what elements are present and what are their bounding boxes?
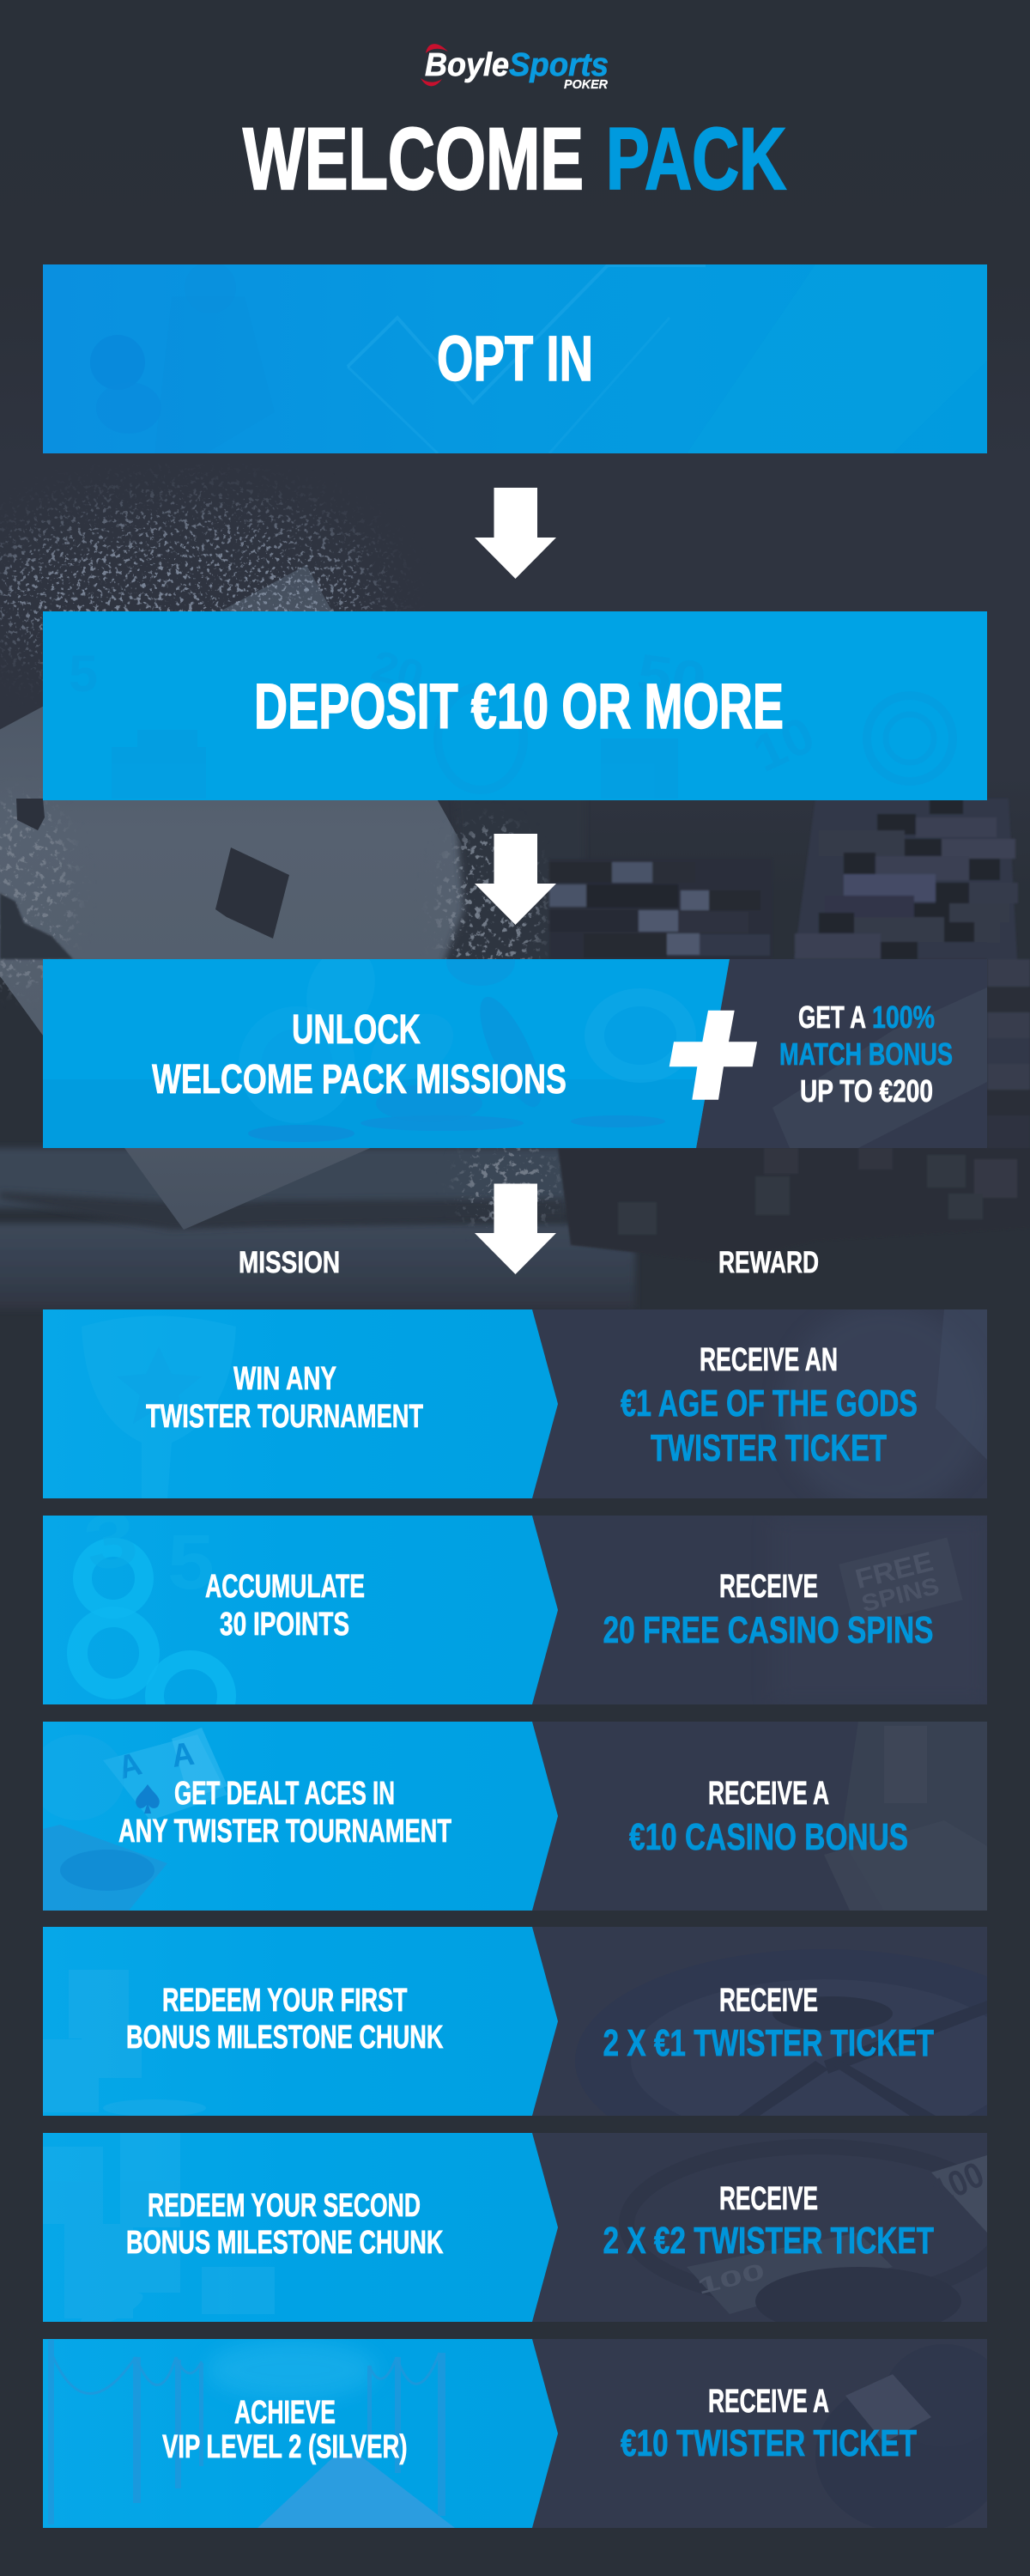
bonus text: 100% — [872, 999, 935, 1035]
row 1: twister tournament: TWISTER TICKET — [651, 1427, 887, 1469]
arrow 3 — [475, 1183, 556, 1274]
row 4: first bonus milestone: RECEIVE — [719, 1983, 818, 2019]
row 3: dealt aces — [30, 1722, 987, 1911]
logo: BoyleSports Poker: Boyle — [425, 47, 509, 83]
card — [0, 566, 467, 1230]
panel: unlock missions plus match bonus — [43, 959, 987, 1148]
row 5: second bonus milestone: 100 — [926, 2154, 990, 2212]
arrow 2 — [475, 834, 556, 925]
panel: deposit: 20 — [367, 641, 429, 701]
icon: plus sign — [670, 1011, 757, 1100]
row 2: accumulate ipoints: SPINS — [859, 1572, 942, 1617]
panel: deposit — [43, 611, 987, 800]
row 3: dealt aces: GET DEALT ACES IN — [174, 1776, 395, 1812]
row 6: vip level: RECEIVE A — [708, 2384, 829, 2420]
row 3: dealt aces: €10 CASINO BONUS — [629, 1816, 908, 1858]
bonus text: MATCH BONUS — [779, 1036, 953, 1072]
unlock side — [43, 959, 730, 1148]
row 5: second bonus milestone: 2 X €2 TWISTER TICKET — [603, 2220, 934, 2262]
row 4: first bonus milestone: 2 X €1 TWISTER TICKET — [603, 2022, 934, 2064]
row 4: first bonus milestone: BONUS MILESTONE CHUNK — [126, 2020, 444, 2056]
row 4: first bonus milestone: REDEEM YOUR FIRST — [162, 1983, 407, 2019]
panel: deposit: 50 — [633, 642, 710, 713]
background: dark page with exploding card and chip stacks — [0, 464, 1030, 1305]
label: OPT IN — [437, 323, 593, 394]
row 2: accumulate ipoints: RECEIVE — [719, 1569, 818, 1605]
row 6: vip level — [43, 2339, 1004, 2533]
panel: deposit: 10 — [744, 705, 823, 783]
row 5: second bonus milestone: BONUS MILESTONE CHUNK — [126, 2225, 444, 2261]
row 2: accumulate ipoints: 5 — [167, 1520, 215, 1606]
logo: BoyleSports Poker: Sports — [509, 47, 609, 83]
match bonus side decoration — [772, 987, 987, 1148]
row 2: accumulate ipoints: 3 — [78, 1495, 144, 1589]
label: DEPOSIT €10 OR MORE — [254, 671, 784, 742]
title: Welcome Pack: WELCOME — [243, 110, 584, 208]
panel: deposit: 5 — [69, 645, 98, 702]
unlock side: WELCOME PACK MISSIONS — [152, 1057, 566, 1103]
row 1: twister tournament — [43, 1305, 987, 1511]
row 6: vip level: VIP LEVEL 2 (SILVER) — [162, 2429, 407, 2465]
row 3: dealt aces: A — [169, 1736, 197, 1775]
row 2: accumulate ipoints — [43, 1516, 987, 1704]
arrow 1 — [475, 488, 556, 579]
row 5: second bonus milestone: RECEIVE — [719, 2181, 818, 2217]
row 2: accumulate ipoints: FREE — [852, 1546, 936, 1595]
row 5: second bonus milestone: REDEEM YOUR SECOND — [148, 2188, 421, 2224]
row 2: accumulate ipoints: 30 IPOINTS — [220, 1607, 349, 1643]
row 1: twister tournament: WIN ANY — [233, 1361, 336, 1397]
row 1: twister tournament: RECEIVE AN — [700, 1342, 838, 1378]
row 1: twister tournament: €1 AGE OF THE GODS — [621, 1382, 918, 1425]
row 6: vip level: ACHIEVE — [234, 2395, 336, 2431]
row 6: vip level: €10 TWISTER TICKET — [621, 2422, 917, 2464]
chip stack bricks — [549, 799, 1030, 1262]
row 4: first bonus milestone — [43, 1927, 987, 2116]
row 3: dealt aces: A — [114, 1746, 145, 1787]
row 5: second bonus milestone: 100 — [694, 2257, 767, 2300]
unlock text: UNLOCK — [292, 1007, 421, 1053]
heading: mission: MISSION — [239, 1246, 340, 1279]
row 3: dealt aces: RECEIVE A — [708, 1776, 829, 1812]
logo: BoyleSports Poker: POKER — [564, 77, 608, 92]
bonus text — [779, 999, 953, 1109]
row 3: dealt aces: ANY TWISTER TOURNAMENT — [118, 1814, 451, 1850]
panel: opt in — [43, 262, 987, 453]
bonus text: UP TO €200 — [800, 1073, 933, 1109]
bonus text: GET A — [798, 999, 866, 1035]
row 2: accumulate ipoints: ACCUMULATE — [205, 1569, 365, 1605]
heading: reward: REWARD — [718, 1246, 819, 1279]
row 5: second bonus milestone — [43, 2133, 1004, 2336]
title: Welcome Pack: PACK — [606, 110, 786, 208]
row 1: twister tournament: TWISTER TOURNAMENT — [146, 1399, 423, 1435]
card suit shards — [215, 848, 289, 939]
logo: BoyleSports Poker — [421, 44, 609, 92]
row 2: accumulate ipoints: 20 FREE CASINO SPINS — [603, 1609, 934, 1651]
